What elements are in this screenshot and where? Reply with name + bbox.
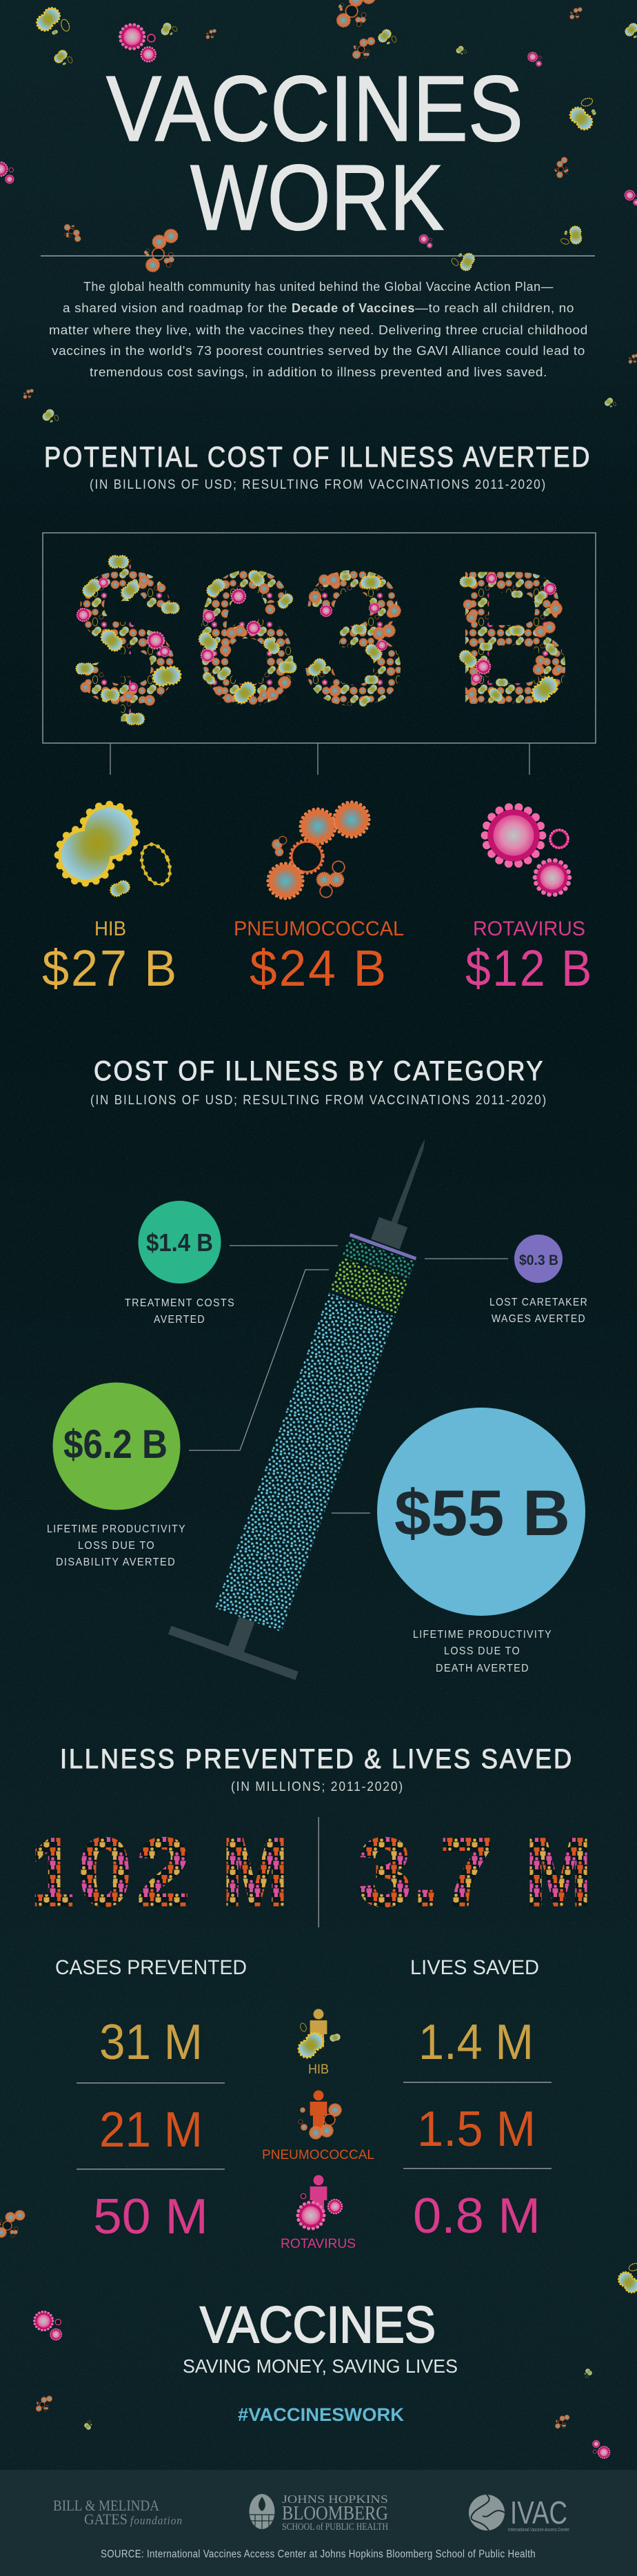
big number: 3.7 M made of people: . (413, 1818, 439, 1926)
logo: Johns Hopkins Bloomberg: JOHNS HOPKINS (282, 2493, 388, 2506)
logo: Johns Hopkins Bloomberg (250, 2493, 388, 2533)
panel: $63 B total made of germs (43, 526, 596, 775)
callout: treatment costs: $1.4 B (146, 1228, 213, 1257)
panel: Hib: $27 B (42, 940, 179, 997)
table: lives saved (403, 2015, 552, 2244)
callout: death productivity loss (332, 1408, 585, 1674)
heading: potential cost: (IN BILLIONS OF USD; RESULTING FROM VACCINATIONS 2011-2020) (90, 478, 547, 492)
icon: person with Hib: HIB (308, 2062, 329, 2077)
callout: death productivity loss: DEATH AVERTED (436, 1663, 529, 1674)
panel: $63 B total made of germs: 3 (301, 530, 407, 744)
panel: rotavirus (465, 807, 594, 997)
callout: treatment costs: TREATMENT COSTS (125, 1297, 235, 1309)
table: lives saved: 1.5 M (417, 2102, 536, 2157)
footer band (0, 2470, 637, 2576)
table: cases prevented (77, 2015, 225, 2244)
heading: illness prevented (60, 1744, 574, 1794)
heading: cost by category: (IN BILLIONS OF USD; RESULTING FROM VACCINATIONS 2011-2020) (90, 1093, 547, 1108)
callout: death productivity loss: $55 B (394, 1477, 570, 1549)
column headings: CASES PREVENTED (55, 1956, 247, 1979)
column headings: LIVES SAVED (410, 1956, 539, 1979)
panel: Hib: HIB (94, 917, 126, 940)
intro paragraph: a shared vision and roadmap for the (63, 301, 287, 315)
callout: lost caretaker wages: WAGES AVERTED (492, 1313, 586, 1325)
heading: cost by category (90, 1056, 547, 1108)
callout: death productivity loss: LOSS DUE TO (444, 1645, 520, 1657)
table: lives saved: 0.8 M (413, 2189, 540, 2244)
callout: lost caretaker wages: $0.3 B (519, 1252, 558, 1268)
icon: large germs forming the letters (74, 549, 563, 731)
panel: $63 B total made of germs: 6 (194, 530, 300, 744)
callout: disability productivity loss: LIFETIME PRODUCTIVITY (47, 1523, 186, 1535)
callout: lost caretaker wages: LOST CARETAKER (489, 1297, 588, 1308)
title: VACCINES (106, 57, 523, 161)
panel: pneumococcal: PNEUMOCOCCAL (234, 917, 404, 940)
panel: Hib (42, 804, 179, 997)
table: cases prevented: 50 M (93, 2189, 208, 2244)
big number: 3.7 M made of people: M (525, 1818, 592, 1926)
big number: 102 M made of people: 1 (31, 1818, 74, 1926)
intro paragraph: The global health community has united behind the Global Vaccine Action Plan— (83, 279, 554, 294)
logo: Johns Hopkins Bloomberg: SCHOOL of PUBLIC HEALTH (282, 2522, 388, 2533)
callout: disability productivity loss: $6.2 B (63, 1422, 168, 1467)
intro paragraph (49, 279, 588, 379)
logo: Gates Foundation: GATES (84, 2511, 128, 2528)
intro paragraph: Decade of Vaccines (292, 301, 415, 315)
table: cases prevented: 21 M (99, 2102, 203, 2158)
intro paragraph: tremendous cost savings, in addition to illness prevented and lives saved. (90, 365, 547, 379)
big number: 102 M made of people: 0 (78, 1818, 132, 1926)
panel: pneumococcal: $24 B (250, 940, 388, 997)
logo: Gates Foundation: foundation (130, 2514, 183, 2527)
logo: IVAC (469, 2495, 570, 2533)
logo: IVAC: IVAC (510, 2495, 567, 2531)
icon: rotavirus germ (485, 807, 569, 895)
heading: potential cost (44, 440, 592, 492)
panel: $63 B total made of germs: B (454, 530, 573, 744)
logo: Gates Foundation (53, 2497, 183, 2528)
big number: 102 M made of people: M (222, 1818, 288, 1926)
icon: person with rotavirus (281, 2175, 356, 2251)
icon: Hib germ (58, 804, 175, 900)
table: cases prevented: 31 M (99, 2015, 203, 2070)
callout: treatment costs (125, 1201, 338, 1326)
panel: pneumococcal (234, 802, 404, 997)
syringe chart (168, 1114, 483, 1680)
panel: rotavirus: ROTAVIRUS (473, 917, 585, 940)
logo: IVAC: International Vaccine Access Center (508, 2528, 570, 2533)
heading: cost by category: COST OF ILLNESS BY CATEGORY (94, 1056, 545, 1086)
closing message (183, 2296, 458, 2425)
icon: person with Hib (299, 2009, 341, 2077)
icon: person with rotavirus: ROTAVIRUS (281, 2237, 356, 2251)
source line: SOURCE: International Vaccines Access Center at Johns Hopkins Bloomberg School of Public Health (101, 2548, 536, 2560)
icon: person with pneumococcal: PNEUMOCOCCAL (262, 2148, 374, 2162)
closing message: #VACCINESWORK (238, 2404, 404, 2425)
table: lives saved: 1.4 M (418, 2015, 534, 2070)
title: WORK (190, 145, 444, 250)
intro paragraph: —to reach all children, no (415, 301, 574, 315)
callout: disability productivity loss: DISABILITY AVERTED (56, 1556, 176, 1568)
panel: rotavirus: $12 B (465, 940, 594, 997)
big number: 3.7 M made of people: 3 (358, 1818, 412, 1926)
logo: Gates Foundation: BILL & MELINDA (53, 2497, 159, 2514)
big number: 102 M made of people: 2 (136, 1818, 190, 1926)
callout: lost caretaker wages (425, 1235, 588, 1325)
callout: death productivity loss: LIFETIME PRODUCTIVITY (413, 1629, 552, 1641)
intro paragraph: matter where they live, with the vaccines they need. Delivering three crucial childhood (49, 323, 588, 337)
icon: pneumococcal germ (268, 802, 369, 898)
closing message: VACCINES (200, 2296, 436, 2353)
heading: illness prevented: (IN MILLIONS; 2011-2020) (231, 1780, 404, 1794)
panel: $63 B total made of germs: $ (74, 526, 177, 749)
big number: 102 M made of people (31, 1818, 288, 1926)
closing message: SAVING MONEY, SAVING LIVES (183, 2355, 458, 2377)
big number: 3.7 M made of people: 7 (440, 1818, 494, 1926)
title (106, 57, 523, 250)
logo: Johns Hopkins Bloomberg: BLOOMBERG (282, 2503, 388, 2524)
heading: illness prevented: ILLNESS PREVENTED & LIVES SAVED (60, 1744, 574, 1774)
callout: disability productivity loss (47, 1270, 329, 1568)
callout: treatment costs: AVERTED (154, 1314, 205, 1326)
big number: 3.7 M made of people (358, 1818, 592, 1926)
intro paragraph: vaccines in the world's 73 poorest countries served by the GAVI Alliance could lead to (52, 343, 585, 358)
column headings (55, 1956, 539, 1979)
callout: disability productivity loss: LOSS DUE TO (78, 1540, 155, 1552)
icon: person with pneumococcal (262, 2090, 374, 2162)
